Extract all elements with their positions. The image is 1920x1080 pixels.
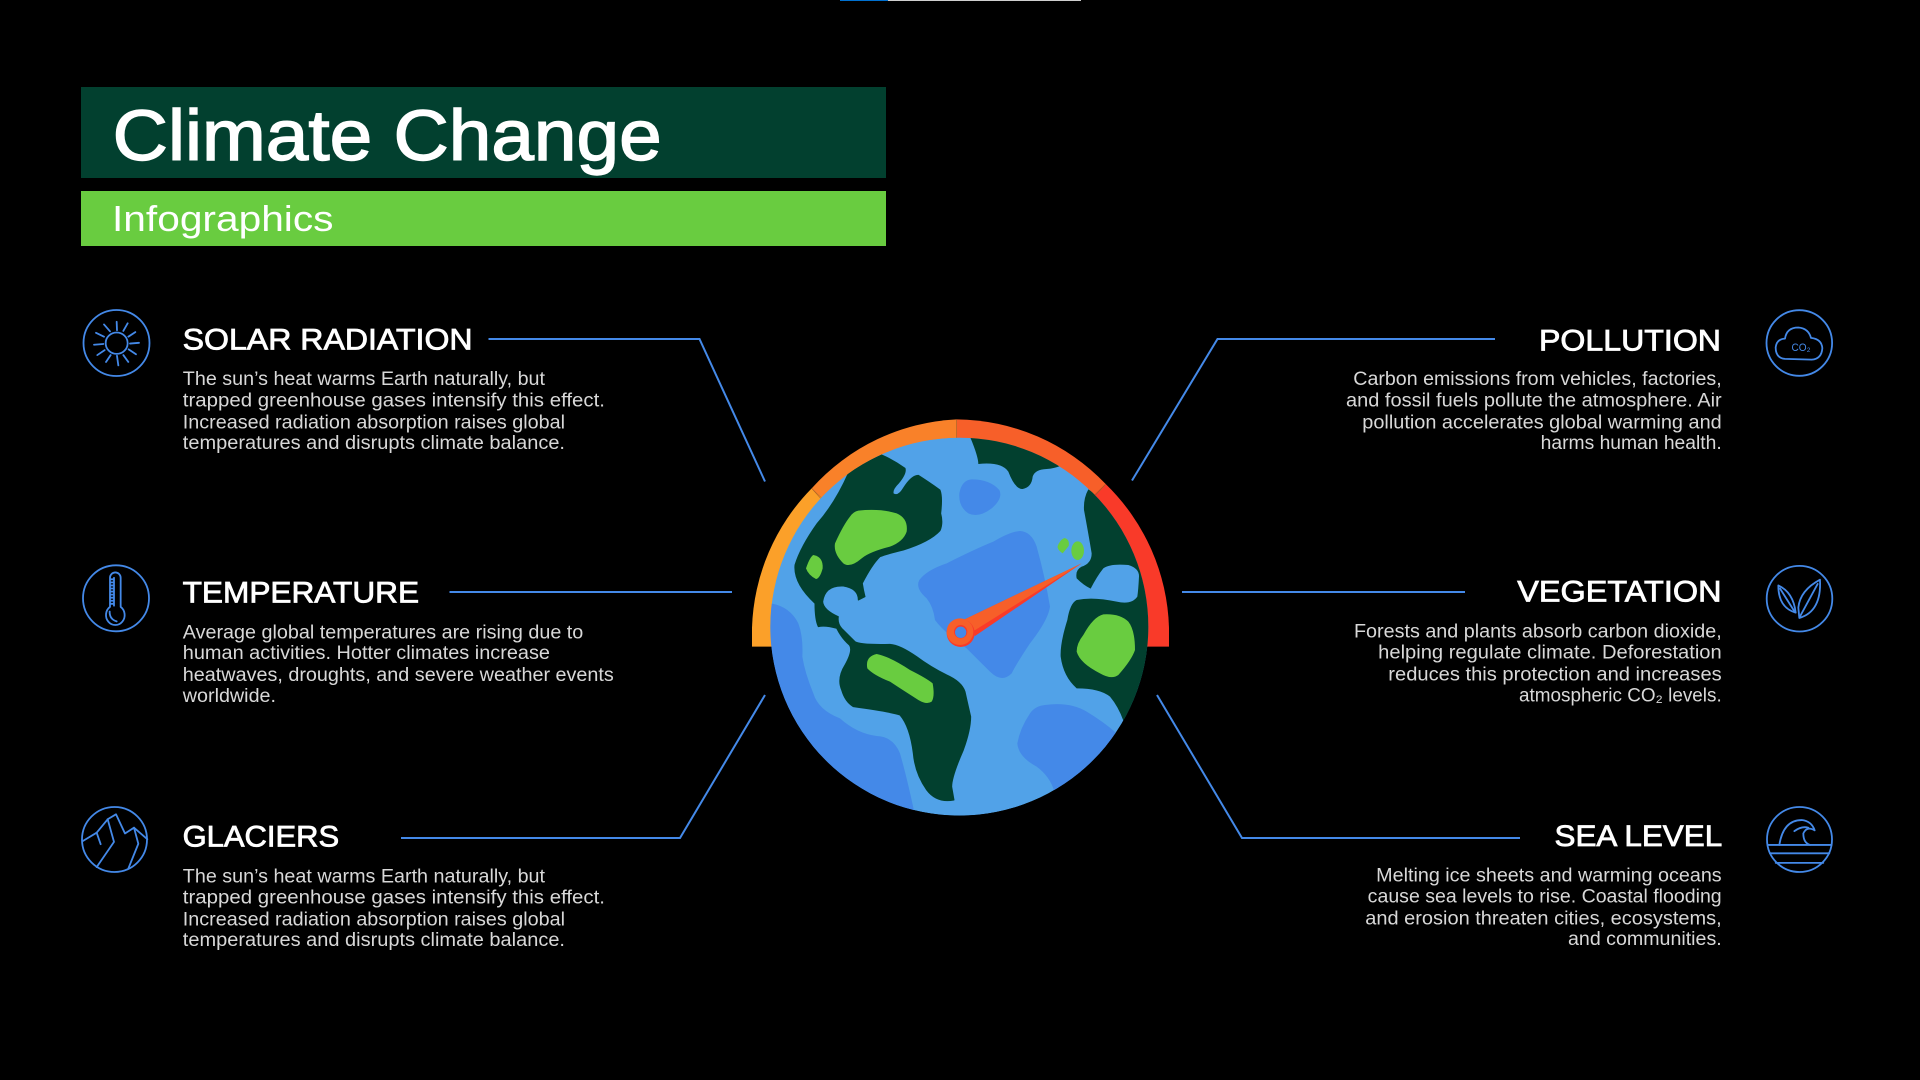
heading and text: temperature: human activities. Hotter climates increase — [183, 643, 550, 664]
title banner — [81, 87, 886, 178]
heading and text: pollution — [1346, 325, 1722, 454]
heading and text: vegetation: helping regulate climate. Deforestation — [1378, 642, 1722, 663]
icon: CO2 cloud — [1766, 310, 1832, 376]
heading and text: sea level: and communities. — [1568, 929, 1722, 950]
heading and text: glaciers: GLACIERS — [183, 821, 339, 854]
land: arctic — [970, 433, 1060, 489]
icon: ocean wave — [1767, 807, 1832, 872]
connector: solar radiation — [488, 339, 765, 482]
earth — [763, 433, 1163, 816]
land: eurasia and africa — [1060, 489, 1148, 720]
connector: temperature — [450, 591, 732, 593]
heading and text: sea level: SEA LEVEL — [1554, 820, 1722, 853]
connector: glaciers — [401, 695, 765, 838]
heading and text: pollution: and fossil fuels pollute the atmosphere. Air — [1346, 390, 1722, 411]
subtitle banner — [81, 191, 886, 246]
heading and text: glaciers: trapped greenhouse gases intensify this effect. — [183, 887, 605, 908]
heading and text: glaciers — [183, 821, 605, 951]
heading and text: temperature: worldwide. — [182, 686, 276, 707]
heading and text: sea level — [1365, 820, 1722, 950]
gauge needle — [947, 563, 1082, 647]
heading and text: glaciers: Increased radiation absorption raises global — [183, 909, 565, 930]
heading and text: solar radiation: Increased radiation absorption raises global — [183, 412, 565, 433]
gauge arc — [752, 419, 1169, 647]
heading and text: temperature: heatwaves, droughts, and severe weather events — [183, 665, 614, 686]
heading and text: glaciers: temperatures and disrupts climate balance. — [183, 930, 565, 951]
heading and text: pollution: Carbon emissions from vehicles, factories, — [1353, 369, 1722, 390]
ocean: deep top — [959, 479, 1000, 515]
heading and text: vegetation: VEGETATION — [1517, 576, 1722, 609]
heading and text: pollution: POLLUTION — [1539, 325, 1721, 358]
icon: thermometer — [83, 565, 149, 631]
heading and text: solar radiation: The sun’s heat warms Earth naturally, but — [183, 369, 546, 390]
heading and text: vegetation: reduces this protection and increases — [1388, 664, 1722, 685]
heading and text: pollution: harms human health. — [1541, 433, 1722, 454]
ocean: deep left — [763, 603, 914, 811]
heading and text: solar radiation: SOLAR RADIATION — [183, 323, 473, 356]
heading and text: temperature: TEMPERATURE — [183, 577, 419, 610]
heading and text: solar radiation: temperatures and disrupts climate balance. — [183, 433, 565, 454]
subtitle banner: Infographics — [112, 198, 334, 239]
heading and text: temperature: Average global temperatures are rising due to — [183, 622, 583, 643]
icon: leaves — [1767, 566, 1832, 632]
connector: pollution — [1132, 339, 1495, 480]
connector: sea level — [1157, 695, 1520, 838]
title banner: Climate Change — [113, 97, 662, 176]
heading and text: vegetation — [1354, 576, 1722, 707]
forest patches — [806, 510, 1135, 703]
heading and text: pollution: pollution accelerates global warming and — [1362, 412, 1722, 433]
heading and text: sea level: Melting ice sheets and warming oceans — [1376, 866, 1722, 887]
heading and text: vegetation: atmospheric CO₂ levels. — [1519, 686, 1722, 707]
ocean: deep centre — [918, 531, 1050, 678]
heading and text: solar radiation — [183, 323, 605, 454]
icon: CO2 cloud: CO₂ — [1792, 342, 1810, 354]
heading and text: glaciers: The sun’s heat warms Earth naturally, but — [183, 866, 546, 887]
heading and text: temperature — [182, 577, 614, 707]
land: americas — [795, 455, 971, 801]
icon: sun — [84, 310, 150, 376]
ocean: deep bottom right — [1017, 704, 1117, 791]
heading and text: solar radiation: trapped greenhouse gases intensify this effect. — [183, 390, 605, 411]
heading and text: sea level: and erosion threaten cities, ecosystems, — [1365, 908, 1722, 929]
globe gauge — [752, 419, 1169, 816]
heading and text: vegetation: Forests and plants absorb carbon dioxide, — [1354, 622, 1722, 643]
icon: mountain glacier — [82, 807, 147, 872]
connector: vegetation — [1182, 591, 1465, 593]
heading and text: sea level: cause sea levels to rise. Coastal flooding — [1368, 887, 1722, 908]
